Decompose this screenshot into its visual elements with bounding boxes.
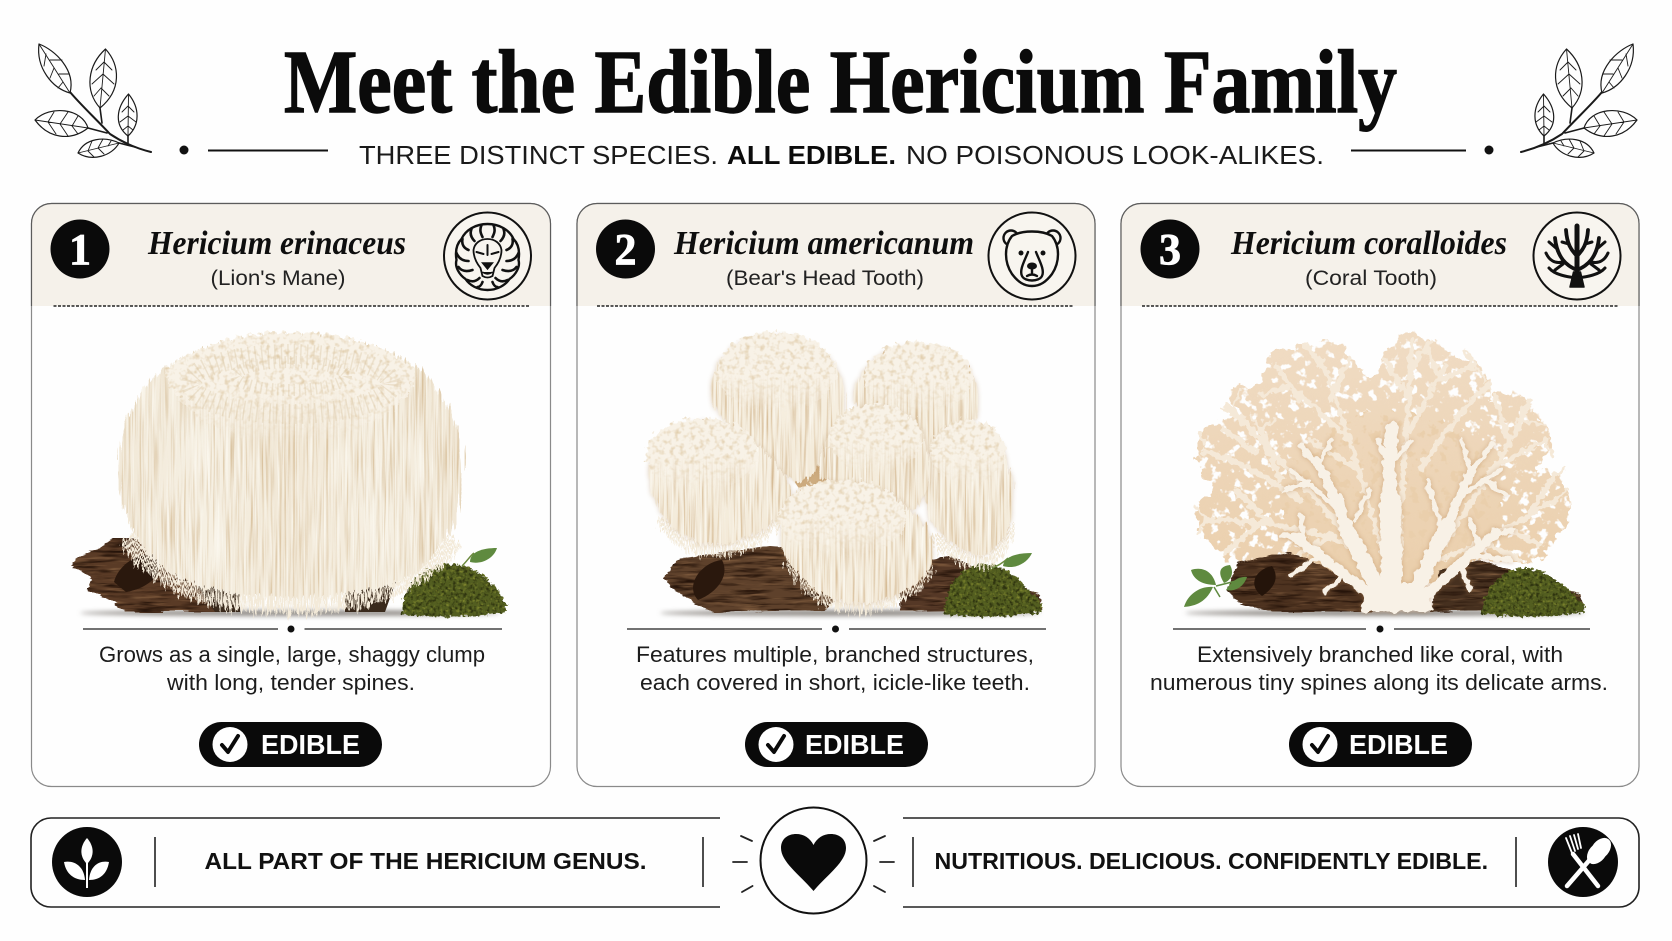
card frame — [1121, 204, 1639, 786]
cluster E — [924, 424, 1013, 556]
cluster C fringe — [662, 510, 785, 550]
panel: Lion's Mane card — [32, 204, 550, 786]
separator — [702, 837, 704, 887]
description: Extensively branched like coral, with — [1197, 642, 1563, 667]
icon: heart with rays — [733, 808, 894, 914]
common name: (Bear's Head Tooth) — [726, 266, 924, 290]
divider with dot — [1173, 626, 1590, 632]
subtitle with flanking rules — [180, 140, 1494, 170]
panel: bottom banner — [31, 808, 1639, 914]
illustration: coral tooth mushroom — [1184, 332, 1585, 617]
number badge 1: 1 — [69, 225, 91, 274]
divider with dot — [627, 626, 1046, 632]
cluster E crown — [930, 420, 1006, 484]
separator — [1515, 837, 1517, 887]
crown spine ticks — [191, 354, 391, 414]
common name: (Lion's Mane) — [210, 266, 346, 290]
icon: right leaf sprig — [1521, 44, 1637, 157]
panel: Bear's Head Tooth card — [577, 204, 1095, 786]
subtitle with flanking rules: THREE DISTINCT SPECIES. — [359, 140, 718, 170]
illustration: lion's mane mushroom — [72, 332, 506, 617]
dark gaps under spines — [190, 570, 400, 612]
leaves — [1184, 565, 1247, 607]
moss — [1482, 568, 1585, 617]
species name: Hericium coralloides — [1230, 225, 1507, 262]
cluster C crown — [646, 418, 758, 490]
number badge 1 — [50, 220, 110, 278]
edible badge — [745, 722, 928, 767]
subtitle with flanking rules: NO POISONOUS LOOK-ALIKES. — [906, 140, 1324, 170]
banner frame right — [903, 818, 1639, 907]
dashed header rule — [1142, 305, 1619, 307]
cluster A crown — [716, 332, 836, 412]
illustration: bear's head mushroom — [646, 332, 1042, 617]
number badge 3 — [1140, 220, 1200, 278]
cluster D crown — [829, 404, 921, 472]
title: Meet the Edible Hericium Family — [284, 33, 1397, 132]
divider with dot — [83, 626, 502, 632]
card header band — [577, 204, 1095, 306]
description — [1150, 642, 1608, 695]
icon: lion — [444, 212, 531, 300]
edible badge: EDIBLE — [805, 729, 904, 760]
edible badge: EDIBLE — [1349, 729, 1448, 760]
card header band — [1121, 204, 1639, 306]
front branches — [1282, 428, 1512, 610]
icon: coral tree — [1534, 212, 1620, 300]
card frame — [577, 204, 1095, 786]
number badge 3: 3 — [1159, 225, 1181, 274]
moss — [944, 564, 1042, 617]
icon: bear — [988, 212, 1076, 300]
separator — [154, 837, 156, 887]
description: Features multiple, branched structures, — [636, 642, 1034, 667]
mushroom body — [118, 336, 463, 598]
back lace fan — [1197, 332, 1570, 565]
card frame — [32, 204, 550, 786]
icon: left leaf sprig — [35, 44, 151, 157]
tan interior — [770, 425, 925, 515]
common name: (Coral Tooth) — [1305, 266, 1437, 290]
logs — [663, 546, 1042, 612]
edible badge — [1289, 722, 1472, 767]
lower fringe — [135, 535, 447, 597]
cluster F fringe — [790, 560, 930, 605]
back branches — [1195, 340, 1568, 590]
log — [1227, 552, 1585, 612]
warm solid core — [1282, 410, 1502, 590]
edible badge: EDIBLE — [261, 729, 360, 760]
top border — [1121, 204, 1639, 306]
dashed header rule — [597, 305, 1073, 307]
cluster D — [821, 407, 930, 510]
species name: Hericium erinaceus — [147, 225, 406, 262]
top border — [577, 204, 1095, 306]
top border — [32, 204, 550, 306]
number badge 2 — [596, 220, 655, 278]
description — [636, 642, 1034, 695]
cluster F — [781, 482, 934, 604]
left banner text: ALL PART OF THE HERICIUM GENUS. — [204, 848, 646, 874]
subtitle with flanking rules: ALL EDIBLE. — [727, 140, 896, 170]
description: each covered in short, icicle-like teeth. — [640, 670, 1030, 695]
description: numerous tiny spines along its delicate arms. — [1150, 670, 1608, 695]
cluster E fringe — [935, 525, 1010, 562]
edible badge — [199, 722, 382, 767]
banner frame left — [31, 818, 720, 907]
separator — [912, 837, 914, 887]
mushroom crown — [165, 332, 417, 442]
cluster F crown — [778, 480, 906, 556]
cluster B crown — [864, 342, 972, 414]
icon: fork and spoon — [1548, 827, 1618, 897]
description: with long, tender spines. — [166, 670, 415, 695]
description: Grows as a single, large, shaggy clump — [99, 642, 485, 667]
card header band — [32, 204, 550, 306]
species name: Hericium americanum — [673, 225, 974, 262]
dashed header rule — [54, 305, 529, 307]
number badge 2: 2 — [614, 225, 636, 274]
cluster C — [649, 422, 792, 545]
log — [72, 537, 236, 612]
right banner text: NUTRITIOUS. DELICIOUS. CONFIDENTLY EDIBLE. — [934, 848, 1488, 874]
cluster A — [711, 336, 846, 483]
cluster B — [853, 346, 979, 453]
description — [99, 642, 485, 695]
moss — [402, 564, 506, 617]
panel: Coral Tooth card — [1121, 204, 1639, 786]
icon: sprout — [52, 827, 122, 897]
